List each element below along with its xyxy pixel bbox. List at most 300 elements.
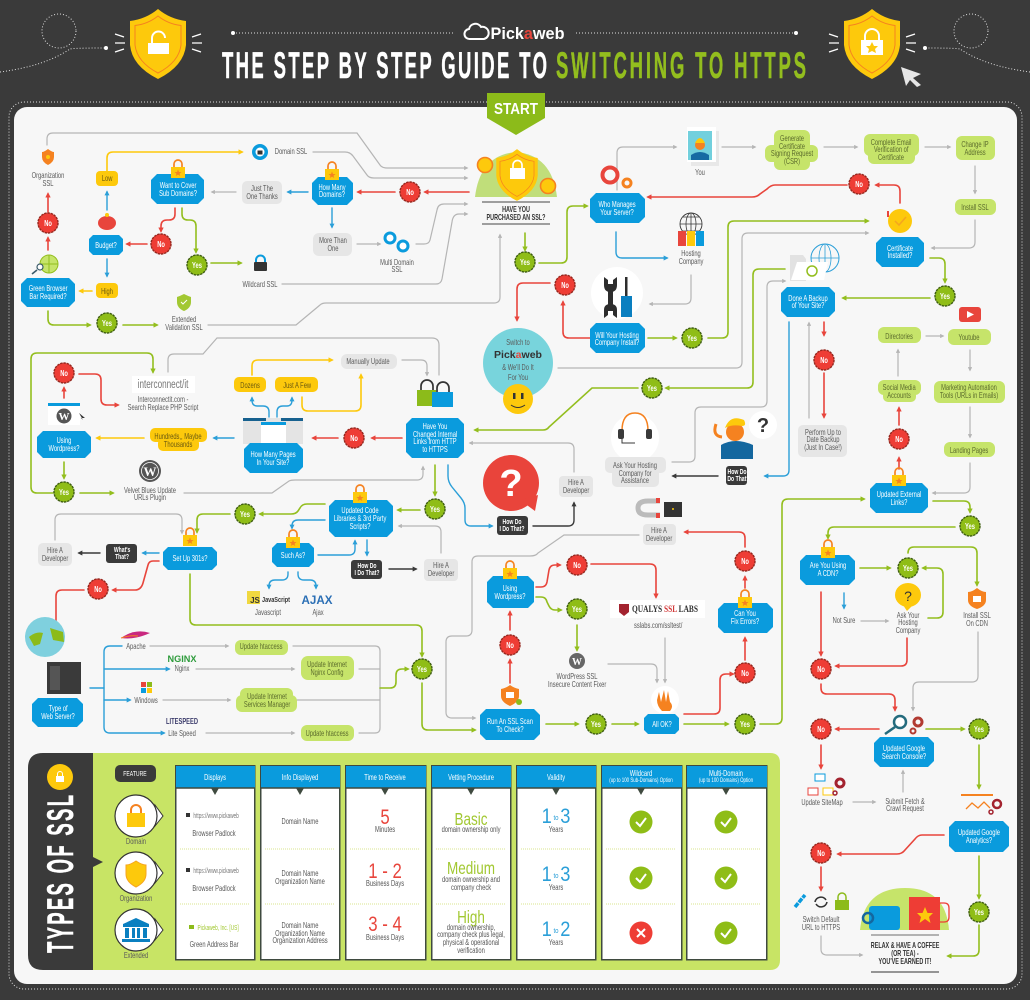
node: type of web server: Web Server? xyxy=(41,711,75,721)
column: vetting procedure: Medium xyxy=(447,859,495,879)
column: validity: 1 xyxy=(542,918,552,941)
yes/no badges: No xyxy=(817,724,825,734)
column: vetting procedure: domain ownership and xyxy=(442,874,500,884)
column: time to receive: 1 - 2 xyxy=(368,860,402,884)
node: hire a developer left: Developer xyxy=(42,553,69,563)
icons: switch default url: Switch Default xyxy=(803,914,839,924)
yes/no badges: Yes xyxy=(974,907,984,917)
icon: magnet and briefcase xyxy=(638,498,682,518)
column: vetting procedure: company check xyxy=(451,882,491,892)
top right chain xyxy=(483,127,996,487)
node: can you fix errors: Can You xyxy=(734,608,756,618)
yes/no badges: Yes xyxy=(687,333,697,343)
node: type of web server: Type of xyxy=(49,703,68,713)
column: validity: 3 xyxy=(560,805,570,828)
node: landing pages: Landing Pages xyxy=(950,445,989,455)
yes/no badges: No xyxy=(817,848,825,858)
node: social media accounts xyxy=(878,380,921,402)
node: just a few: Just A Few xyxy=(283,380,312,390)
node: how do I do that 1 xyxy=(725,466,750,485)
node: are you using a CDN xyxy=(800,540,855,585)
icon: pages xyxy=(243,418,303,444)
node: ask your hosting company cdn xyxy=(895,583,921,635)
node: install SSL on CDN xyxy=(963,588,991,628)
node: can you fix errors: Fix Errors? xyxy=(731,616,759,626)
icon: analytics xyxy=(961,794,1001,814)
panel: types of SSL xyxy=(28,753,780,970)
node: how do I do that 2 xyxy=(497,516,528,535)
node: how do I do that 3: How Do xyxy=(358,562,377,570)
column: validity xyxy=(517,766,596,960)
node: hire a developer left xyxy=(38,543,72,566)
yes/no badges: No xyxy=(94,584,102,594)
icon: organization SSL xyxy=(32,149,64,188)
node: hire a developer top: Hire A xyxy=(568,477,584,487)
node: have you changed internal links xyxy=(406,380,464,458)
node: generate certificate signing request: (CSR) xyxy=(784,156,800,166)
icon: left shield xyxy=(115,9,202,79)
column: info displayed: Domain Name xyxy=(282,868,318,878)
node: manually update xyxy=(341,354,397,369)
node: will your hosting company install: Will Your Hosting xyxy=(595,330,639,340)
column: vetting procedure: domain ownership only xyxy=(442,824,501,834)
node: hire a developer left: Hire A xyxy=(47,545,63,555)
header decoration left xyxy=(0,14,1030,72)
logo: qualys: QUALYS SSL LABS xyxy=(632,604,698,614)
node: just the one thanks: Just The xyxy=(251,183,273,193)
logo: Pickaweb: Pickaweb xyxy=(490,24,564,43)
feature: domain: Domain xyxy=(126,836,146,846)
node: done a backup: of Your Site? xyxy=(792,300,824,310)
node: ask your hosting company cdn: Company xyxy=(896,625,921,635)
yes/no badges xyxy=(38,174,989,922)
column: vetting procedure xyxy=(432,766,511,960)
node: using wordpress 1 xyxy=(37,431,91,458)
server: windows xyxy=(134,682,158,705)
node: directories: Directories xyxy=(885,331,913,341)
node: update internet services manager: Update Internet xyxy=(247,691,287,701)
logo: javascript: JavaScript xyxy=(262,597,291,604)
icon: domain SSL: Domain SSL xyxy=(275,146,307,156)
node: install SSL xyxy=(955,199,996,215)
node: updated external links: Links? xyxy=(891,497,907,507)
yes/no badges: Yes xyxy=(591,719,601,729)
feature: organization: Organization xyxy=(120,893,152,903)
node: complete email verification: Complete Email xyxy=(871,137,912,147)
feature: extended xyxy=(115,909,163,960)
logo: ajax: AJAX xyxy=(302,593,332,607)
icon: coffee cups xyxy=(860,888,949,930)
interconnectit xyxy=(128,376,198,412)
icon: multi domain SSL: Multi Domain xyxy=(380,257,414,267)
node: how many pages: In Your Site? xyxy=(257,457,289,467)
yes/no badges: Yes xyxy=(430,504,440,514)
node: how many pages xyxy=(244,443,303,473)
node: budget xyxy=(89,213,123,255)
node: hundreds maybe thousands: Hundreds,, Maybe xyxy=(154,431,202,441)
yes/no badges: No xyxy=(44,218,52,228)
node: such as: Such As? xyxy=(281,550,305,560)
column: displays: Green Address Bar xyxy=(190,939,239,949)
node: ask your hosting company cdn: Ask Your xyxy=(897,610,920,620)
velvet blues plugin xyxy=(124,460,176,502)
yes/no badges: Yes xyxy=(974,724,984,734)
node: more than one: More Than xyxy=(319,235,347,245)
text: submit fetch: Submit Fetch & xyxy=(885,796,925,806)
column: validity: to xyxy=(552,928,560,935)
node: change IP address: Change IP xyxy=(961,139,989,149)
switch to pickaweb: & We'll Do It xyxy=(502,362,534,372)
node: updated google search console: Search Console? xyxy=(882,751,926,761)
start tag: START xyxy=(494,101,538,118)
node: ask your hosting company cdn: ? xyxy=(904,588,912,604)
logo: javascript: Javascript xyxy=(255,607,281,617)
node: ask your hosting company: Ask Your Hosting xyxy=(613,460,657,470)
node: ask your hosting company: Assistance xyxy=(621,475,649,485)
node: update internet services manager xyxy=(236,688,297,712)
node: budget: Budget? xyxy=(95,240,117,250)
column: displays: https://www.pickaweb xyxy=(193,868,239,875)
title: SWITCHING TO HTTPS xyxy=(556,46,806,87)
column: wildcard: Wildcard xyxy=(630,768,652,778)
yes/no badges: No xyxy=(820,355,828,365)
feature pill xyxy=(115,765,156,782)
node: perform backup: (Just In Case!) xyxy=(804,442,842,452)
switch to pickaweb: Switch to xyxy=(506,337,530,347)
icon: sitemap xyxy=(801,774,844,807)
icon: wildcard SSL: Wildcard SSL xyxy=(243,279,277,289)
icon: organization SSL: SSL xyxy=(43,178,53,188)
node: how do I do that 2: How Do xyxy=(503,518,522,526)
yes/no badges: Yes xyxy=(59,487,69,497)
column: info displayed: Domain Name xyxy=(282,816,318,826)
node: more than one xyxy=(313,233,352,256)
centre bottom cluster xyxy=(480,498,773,740)
node: certificate installed: Installed? xyxy=(888,250,912,260)
column: info displayed: Organization Name xyxy=(275,928,325,938)
feature: extended: Extended xyxy=(124,950,148,960)
node: updated code libraries: Updated Code xyxy=(341,505,379,515)
node: set up 301s xyxy=(163,528,217,570)
node: just a few xyxy=(275,377,318,392)
switch to pickaweb: Pickaweb xyxy=(494,349,542,361)
velvet blues plugin: URLs Plugin xyxy=(134,492,166,502)
node: type of web server xyxy=(32,698,83,727)
node: how many domains: Domains? xyxy=(319,189,345,199)
node: hire a developer top xyxy=(559,476,593,497)
icon: hosting company: Company xyxy=(679,256,704,266)
icon: wildcard SSL xyxy=(243,256,277,289)
node: marketing automation: Tools (URLs in Emails) xyxy=(940,390,998,400)
node: certificate installed: Certificate xyxy=(887,243,913,253)
feature: organization xyxy=(115,852,163,903)
column: validity: Years xyxy=(549,882,564,892)
node: install SSL on CDN: On CDN xyxy=(966,618,988,628)
column: multi-domain xyxy=(687,766,767,960)
icon: ok hand xyxy=(651,686,679,714)
node: green browser bar required: Bar Required? xyxy=(29,291,67,301)
text: submit fetch: Crawl Request xyxy=(886,803,924,813)
node: hire a developer bottom: Developer xyxy=(646,533,673,543)
server: nginx: NGINX xyxy=(168,654,196,664)
yes/no badges: Yes xyxy=(520,257,530,267)
start tag xyxy=(487,93,545,135)
logo: ajax xyxy=(302,593,332,617)
logo: qualys: sslabs.com/ssltest/ xyxy=(634,620,683,630)
node: generate certificate signing request: Signing Request xyxy=(771,148,813,158)
node: green browser bar required xyxy=(21,255,75,307)
yes/no badges: No xyxy=(406,187,414,197)
node: using wordpress 2: Using xyxy=(503,583,517,593)
switch to pickaweb: For You xyxy=(508,372,528,382)
icon: headset xyxy=(611,413,659,462)
logo: wordpress xyxy=(548,653,607,689)
yes/no badges: No xyxy=(741,556,749,566)
node: perform backup xyxy=(798,425,847,457)
node: updated code libraries: Libraries & 3rd Party xyxy=(334,513,387,523)
node: done a backup: Done A Backup xyxy=(788,293,828,303)
title: THE STEP BY STEP GUIDE TO xyxy=(222,46,547,87)
node: update htaccess 1 xyxy=(235,640,288,655)
column: vetting procedure: Basic xyxy=(455,810,488,830)
node: dozens xyxy=(234,377,266,392)
node: ask your hosting company cdn: Hosting xyxy=(898,617,918,627)
node: are you using a CDN: Are You Using xyxy=(810,560,846,570)
node: ask your hosting company xyxy=(605,457,666,487)
heading: types of SSL: TYPES OF SSL xyxy=(41,795,82,953)
icon: multi domain SSL: SSL xyxy=(392,264,402,274)
node: marketing automation: Marketing Automation xyxy=(941,382,997,392)
node: update htaccess 1: Update htaccess xyxy=(240,641,283,651)
node: set up 301s: Set Up 301s? xyxy=(173,553,207,563)
node: how do I do that 1: How Do xyxy=(728,468,747,476)
node: how many pages: How Many Pages xyxy=(250,449,296,459)
column: validity: Years xyxy=(549,824,564,834)
panel background xyxy=(28,753,780,970)
yes/no badges: Yes xyxy=(647,383,657,393)
node: marketing automation xyxy=(934,381,1005,403)
node: how many domains xyxy=(312,162,353,205)
yes/no badges: No xyxy=(855,179,863,189)
node: hire a developer top: Developer xyxy=(563,485,590,495)
node: all ok xyxy=(644,714,679,734)
feature: domain xyxy=(115,795,163,846)
left cluster labels xyxy=(21,144,414,332)
icon: globe and server xyxy=(25,617,81,694)
node: using wordpress 1: Wordpress? xyxy=(49,443,79,453)
question block: have you purchased an SSL: PURCHASED AN SSL? xyxy=(487,214,545,222)
node: ask your hosting company: Company for xyxy=(619,468,652,478)
left cluster labels: High xyxy=(101,286,113,296)
column: info displayed xyxy=(261,766,340,960)
node: not sure: Not Sure xyxy=(833,615,855,625)
node: such as xyxy=(272,530,314,567)
column: wildcard xyxy=(602,766,682,960)
interconnectit: interconnect/it xyxy=(138,379,189,392)
column: validity: Years xyxy=(549,937,564,947)
yes/no badges: Yes xyxy=(940,291,950,301)
node: updated code libraries: Scripts? xyxy=(350,521,370,531)
node: hire a developer bottom: Hire A xyxy=(651,525,667,535)
yes/no badges: Yes xyxy=(740,719,750,729)
yes/no badges: Yes xyxy=(965,521,975,531)
node: hundreds maybe thousands: Thousands xyxy=(164,439,193,449)
node: certificate installed xyxy=(876,209,924,267)
node: what's that: That? xyxy=(115,553,129,561)
text: relax: (OR TEA) - xyxy=(891,950,919,958)
icon: youtube xyxy=(959,307,981,322)
node: more than one: One xyxy=(328,243,338,253)
column: info displayed: Organization Name xyxy=(275,876,325,886)
middle cluster xyxy=(25,354,593,741)
node: how do I do that 3: I Do That? xyxy=(355,569,380,577)
node: all ok: All OK? xyxy=(652,719,672,729)
column: displays: Displays xyxy=(204,772,226,782)
column: validity: 1 xyxy=(542,863,552,886)
switch to pickaweb xyxy=(483,328,553,414)
node: want to cover sub domains: Want to Cover xyxy=(160,180,197,190)
node: hire a developer middle: Hire A xyxy=(433,560,449,570)
node: updated code libraries xyxy=(329,485,393,537)
column: displays: Pickaweb, Inc. [US] xyxy=(197,925,239,932)
text: relax xyxy=(871,935,940,972)
yes/no badges: No xyxy=(561,280,569,290)
icon: right shield with cursor xyxy=(829,9,921,87)
icon: confused person: ? xyxy=(757,415,769,437)
node: generate certificate signing request: Generate xyxy=(780,133,804,143)
node: perform backup: Date Backup xyxy=(806,434,840,444)
column: displays: Browser Padlock xyxy=(192,883,236,893)
node: run an SSL scan xyxy=(480,685,540,740)
column: displays xyxy=(176,766,255,960)
node: have you changed internal links: Links from HTTP xyxy=(413,436,457,446)
yes/no badges: Yes xyxy=(903,563,913,573)
node: change IP address xyxy=(956,136,995,160)
server: litespeed xyxy=(166,717,198,738)
text: relax: YOU'VE EARNED IT! xyxy=(879,958,931,966)
node: generate certificate signing request xyxy=(765,130,818,170)
interconnectit: Interconnectit.com - xyxy=(138,394,189,404)
node: are you using a CDN: A CDN? xyxy=(818,568,838,578)
logo: ajax: Ajax xyxy=(312,607,324,617)
node: youtube: Youtube xyxy=(959,332,979,342)
node: using wordpress 1: Using xyxy=(57,435,71,445)
feature pill: FEATURE xyxy=(123,770,147,778)
node: who manages your server xyxy=(590,168,645,223)
column: info displayed: Info Displayed xyxy=(282,772,318,782)
node: how many domains: How Many xyxy=(318,182,346,192)
velvet blues plugin: Velvet Blues Update xyxy=(124,485,176,495)
yes/no badges: No xyxy=(157,239,165,249)
node: want to cover sub domains: Sub Domains? xyxy=(159,188,197,198)
node: updated google analytics: Analytics? xyxy=(966,835,992,845)
node: hundreds maybe thousands xyxy=(150,428,207,451)
node: updated external links: Updated External xyxy=(877,489,922,499)
column: wildcard: (up to 100 Sub-Domains) Option xyxy=(609,777,673,784)
icon: shield with coins xyxy=(475,149,557,201)
column: time to receive: Business Days xyxy=(366,878,404,888)
yes/no badges: Yes xyxy=(240,509,250,519)
yes/no badges: No xyxy=(895,434,903,444)
node: can you fix errors xyxy=(718,590,773,633)
server: apache: Apache xyxy=(126,641,146,651)
icon: wordpress browser xyxy=(48,403,85,425)
node: complete email verification: Verification of xyxy=(874,144,909,154)
icon: organization SSL: Organization xyxy=(32,170,64,180)
node: update internet nginx config: Update Internet xyxy=(307,659,347,669)
icon: you xyxy=(687,127,719,177)
column: displays: https://www.pickaweb xyxy=(193,813,239,820)
icon: hosting company: Hosting xyxy=(681,248,701,258)
node: want to cover sub domains xyxy=(151,160,204,204)
velvet blues plugin: W xyxy=(144,464,156,479)
icon: extended validation SSL: Validation SSL xyxy=(165,322,203,332)
column: vetting procedure: domain ownership, xyxy=(447,922,495,932)
node: install SSL: Install SSL xyxy=(961,202,989,212)
icon: extended validation SSL: Extended xyxy=(172,314,196,324)
icon: extended validation SSL xyxy=(165,294,203,332)
node: have you changed internal links: Have You xyxy=(423,421,447,431)
yes/no badges: No xyxy=(506,640,514,650)
node: updated google analytics: Updated Google xyxy=(958,827,1000,837)
column: time to receive: 3 - 4 xyxy=(368,913,402,937)
interconnectit: Search Replace PHP Script xyxy=(128,402,198,412)
icons: switch default url xyxy=(795,893,849,932)
node: run an SSL scan: Run An SSL Scan xyxy=(487,716,533,726)
node: update htaccess 2: Update htaccess xyxy=(306,728,349,738)
icon: tools xyxy=(591,267,643,319)
column: info displayed: Organization Address xyxy=(273,935,328,945)
logo: wordpress: W xyxy=(572,657,582,668)
icon: confused person xyxy=(715,411,777,459)
logo: javascript: JS xyxy=(250,596,261,605)
icon: wordpress browser: W xyxy=(58,411,70,423)
column: time to receive: 5 xyxy=(380,806,390,830)
left cluster labels: Low xyxy=(102,173,113,183)
node: how do I do that 3 xyxy=(351,560,382,579)
node: hire a developer middle: Developer xyxy=(428,568,455,578)
server: litespeed: Lite Speed xyxy=(168,728,196,738)
node: hire a developer bottom xyxy=(643,524,676,545)
question block: have you purchased an SSL xyxy=(475,149,557,224)
yes/no badges: Yes xyxy=(417,664,427,674)
column: time to receive: Business Days xyxy=(366,932,404,942)
node: who manages your server: Your Server? xyxy=(600,207,634,217)
node: update htaccess 2 xyxy=(301,725,354,741)
column: validity: to xyxy=(552,815,560,822)
column: time to receive: Time to Receive xyxy=(364,772,406,782)
logo: wordpress: Insecure Content Fixer xyxy=(548,679,607,689)
column: validity: 2 xyxy=(560,918,570,941)
column: vetting procedure: verification xyxy=(457,945,485,955)
yes/no badges: No xyxy=(817,664,825,674)
node: updated google analytics xyxy=(949,821,1009,852)
column: time to receive xyxy=(346,766,426,960)
server: nginx xyxy=(168,654,196,673)
node: updated external links xyxy=(870,468,928,513)
node: just the one thanks: One Thanks xyxy=(246,191,278,201)
node: how do I do that 1: I Do That? xyxy=(725,475,750,483)
icon: question bubble xyxy=(483,455,539,511)
icon: sitemap: Update SiteMap xyxy=(801,797,843,807)
node: update internet nginx config xyxy=(301,656,354,680)
node: done a backup xyxy=(781,244,839,317)
column: vetting procedure: Vetting Procedure xyxy=(448,772,494,782)
text: submit fetch xyxy=(885,796,925,813)
question block: have you purchased an SSL: HAVE YOU xyxy=(502,206,530,214)
yellow pill pair xyxy=(96,171,118,186)
server: apache xyxy=(121,631,150,651)
